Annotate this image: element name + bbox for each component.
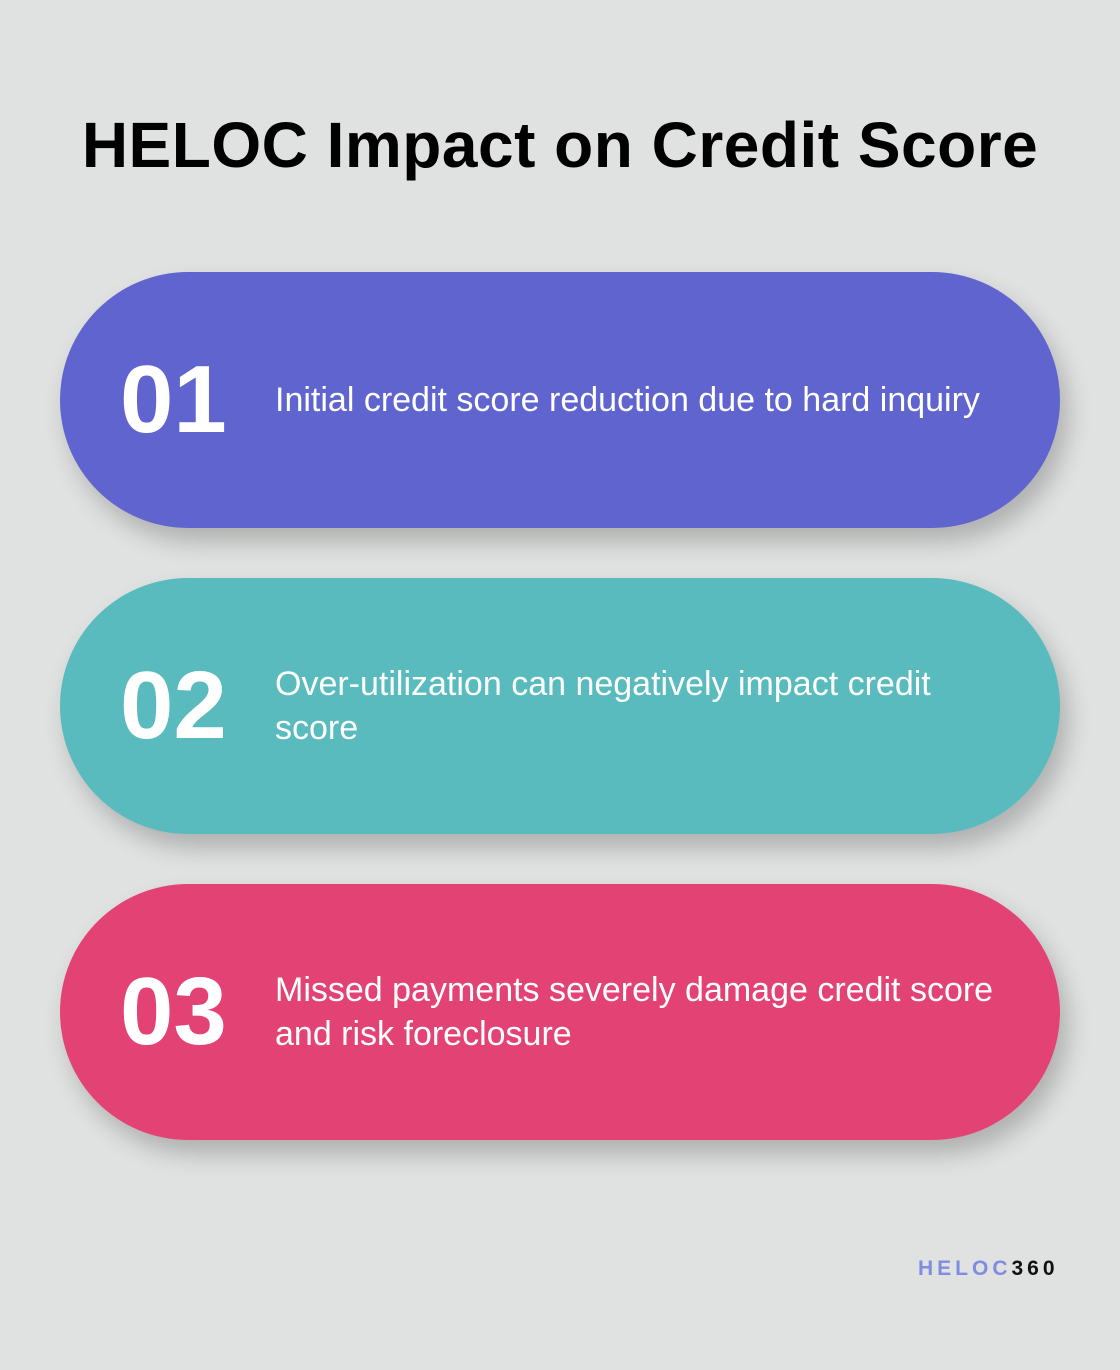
panel: 01 — [60, 272, 1060, 528]
number 02: 02 — [120, 652, 227, 759]
title: HELOC Impact on Credit Score — [82, 109, 1038, 181]
text 02: Over-utilization can negatively impact credit score — [275, 665, 931, 747]
number 03: 03 — [120, 958, 227, 1065]
text 01: Initial credit score reduction due to hard inquiry — [275, 381, 980, 419]
panel: 02 — [60, 578, 1060, 834]
logo: HELOC360 — [918, 1257, 1059, 1280]
text 03: Missed payments severely damage credit score and risk foreclosure — [275, 971, 993, 1053]
panel: 03 — [60, 884, 1060, 1140]
number 01: 01 — [120, 346, 227, 453]
